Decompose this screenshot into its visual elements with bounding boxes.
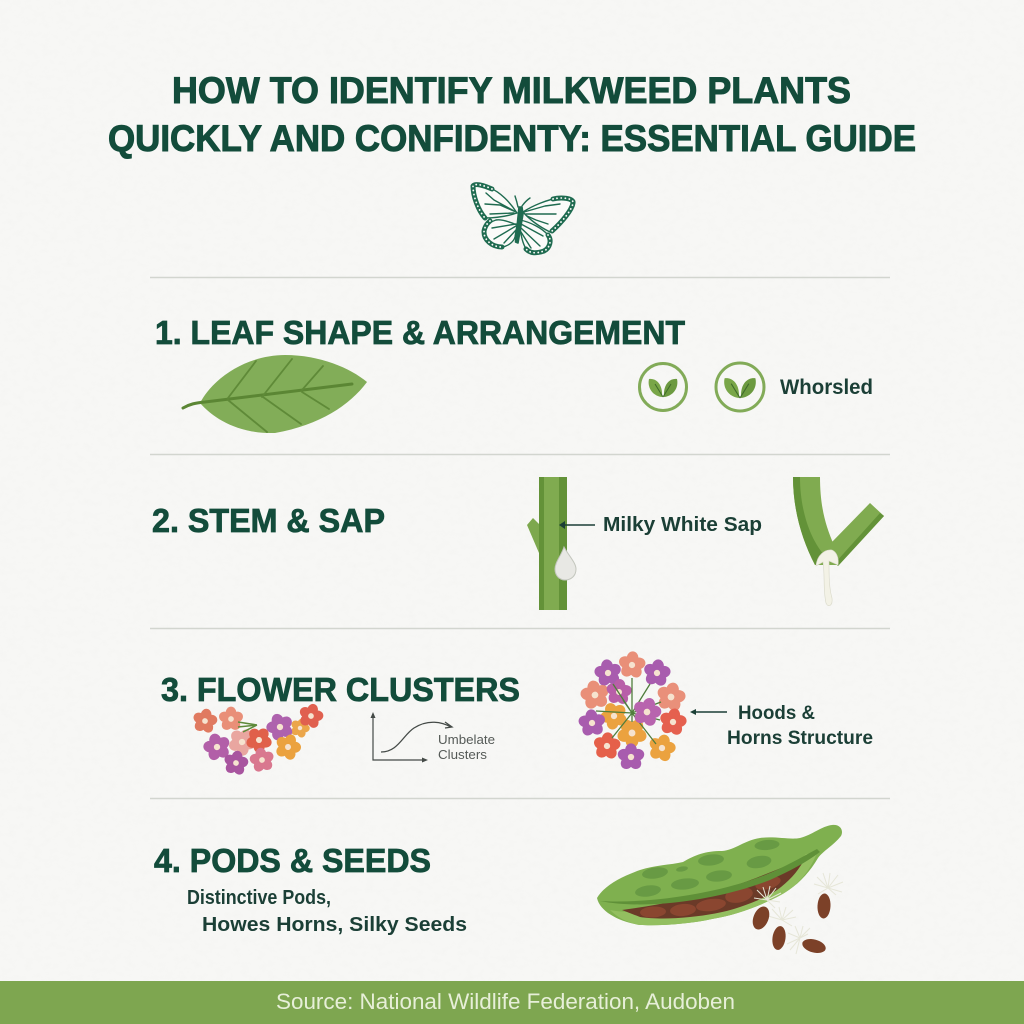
- title: HOW TO IDENTIFY MILKWEED PLANTS: [172, 70, 851, 111]
- dividers: [150, 278, 890, 798]
- icon: stem with sap drop: [527, 477, 576, 610]
- chart: umbelate clusters curve: Umbelate: [438, 732, 495, 747]
- chart: umbelate clusters curve: Clusters: [438, 747, 488, 762]
- icon: large leaf: [183, 355, 367, 433]
- text: pods and seeds description: [187, 887, 467, 936]
- label: hoods and horns structure: [727, 703, 873, 749]
- arrow: to stem: [559, 521, 595, 529]
- footer: source bar: [0, 981, 1024, 1024]
- heading: section 3: 3. FLOWER CLUSTERS: [161, 671, 520, 708]
- icon: leaf pair badge one: [640, 364, 686, 410]
- heading: section 2: 2. STEM & SAP: [152, 502, 385, 539]
- arrow: to flower head: [690, 709, 727, 715]
- illustration: open milkweed pod: [597, 825, 842, 925]
- title: QUICKLY AND CONFIDENTY: ESSENTIAL GUIDE: [108, 118, 916, 159]
- illustration: loose seeds with silk: [750, 873, 843, 955]
- chart: umbelate clusters curve: [370, 712, 495, 762]
- heading: section 1: 1. LEAF SHAPE & ARRANGEMENT: [155, 314, 685, 351]
- label: milky white sap: Milky White Sap: [603, 514, 762, 536]
- icon: broken stem with sap: [793, 477, 884, 606]
- heading: section 4: 4. PODS & SEEDS: [154, 842, 431, 879]
- icon: leaf pair badge two: [716, 363, 764, 411]
- text: pods and seeds description: Howes Horns, Silky Seeds: [202, 914, 467, 936]
- illustration: umbel flower head: [576, 650, 690, 771]
- label: hoods and horns structure: Hoods &: [738, 703, 815, 724]
- icon: butterfly: [473, 185, 573, 253]
- title: [108, 70, 916, 159]
- label: hoods and horns structure: Horns Structure: [727, 728, 873, 749]
- footer: source bar: Source: National Wildlife Federation, Audoben: [276, 989, 735, 1014]
- text: pods and seeds description: Distinctive Pods,: [187, 887, 331, 909]
- label: whorsled: Whorsled: [780, 376, 873, 399]
- illustration: flower cluster spray: [190, 701, 327, 778]
